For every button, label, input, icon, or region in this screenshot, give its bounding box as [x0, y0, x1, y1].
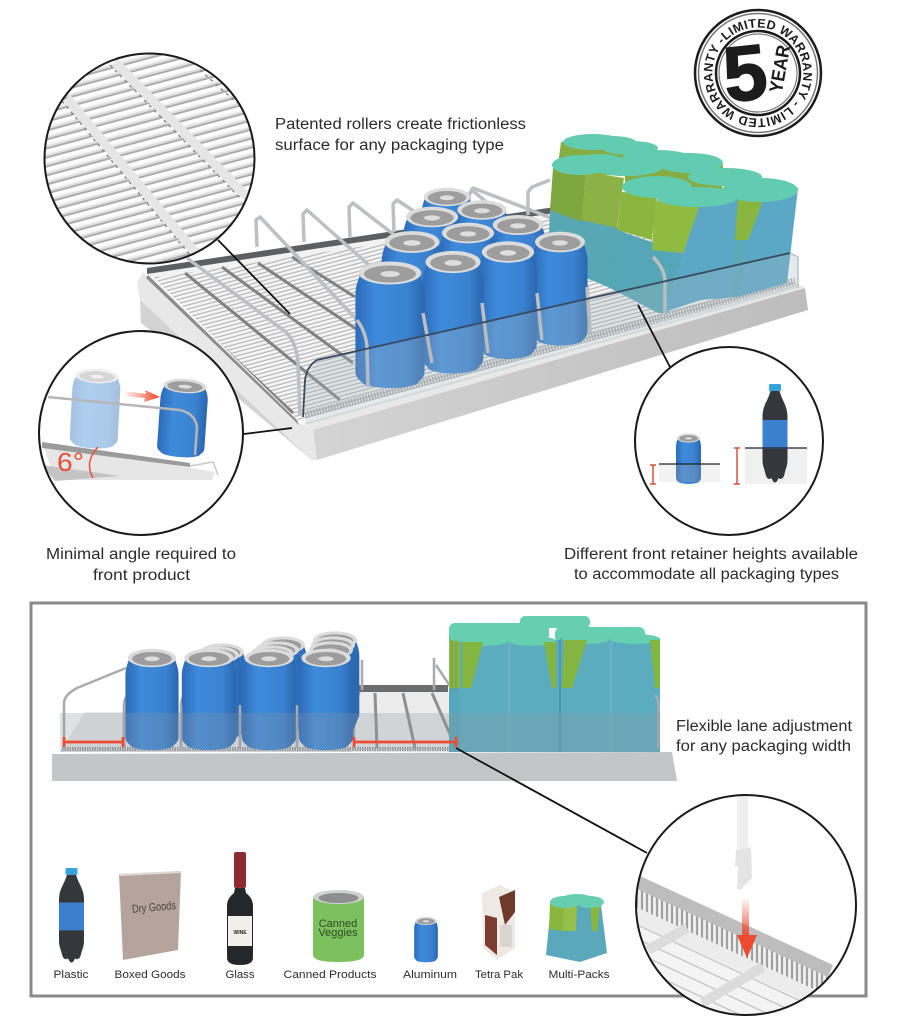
badge numeral: 5	[719, 27, 771, 119]
item: glass: Glass	[226, 969, 255, 981]
caption: angle: front product	[93, 567, 191, 584]
caption: retainer heights: Different front retainer heights available	[564, 546, 858, 563]
inset: divider tool	[635, 794, 857, 1016]
item: glass	[226, 852, 255, 981]
wire side view	[48, 397, 197, 455]
wire posts in front of cans	[357, 257, 665, 387]
caption: lane adjustment: Flexible lane adjustment	[676, 718, 853, 735]
item: canned products: Canned	[319, 918, 357, 930]
leader line: rollers	[218, 240, 290, 314]
roller tray surface	[147, 207, 800, 420]
leader line: angle	[244, 428, 292, 434]
pack rear right	[622, 150, 723, 190]
wire dividers	[64, 658, 456, 750]
retainer top lines	[659, 448, 807, 464]
caption: rollers: surface for any packaging type	[275, 137, 504, 154]
item: multi-packs: Multi-Packs	[548, 969, 610, 981]
caption: lane adjustment: for any packaging width	[676, 738, 851, 755]
caption: retainer heights: to accommodate all packaging types	[574, 566, 839, 583]
front lip of shelf	[305, 285, 808, 460]
angle arc	[89, 447, 98, 478]
lower wire posts in front	[124, 705, 297, 748]
lower shelf front view	[52, 616, 677, 781]
item: tetra pak	[475, 885, 524, 981]
solid can	[156, 377, 209, 459]
glass tint	[676, 464, 701, 482]
rollers	[638, 925, 800, 1014]
caption: rollers: Patented rollers create frictionless	[275, 116, 526, 133]
leader line: retainer	[638, 305, 670, 367]
red height markers	[650, 448, 740, 484]
item: canned products	[284, 890, 377, 981]
pack front	[608, 176, 738, 313]
can in short retainer	[676, 433, 701, 484]
package types row	[54, 852, 610, 981]
bottle	[762, 384, 788, 482]
warranty badge	[694, 8, 822, 138]
red width marker left	[64, 737, 123, 747]
badge ring text: LIMITED WARRANTY - LIMITED WARRANTY -	[704, 18, 812, 128]
rear cans	[193, 631, 359, 741]
symbol band	[637, 908, 813, 992]
item: aluminum	[403, 917, 457, 981]
insertion tool	[735, 790, 752, 889]
caption: angle: Minimal angle required to	[46, 546, 236, 563]
item: boxed goods: Boxed Goods	[114, 969, 186, 981]
shelf front face	[52, 752, 677, 781]
leader line: lane tool	[456, 748, 647, 853]
item: aluminum: Aluminum	[403, 969, 457, 981]
item: plastic	[54, 868, 89, 981]
main shelf unit	[137, 134, 808, 460]
front glass retainer	[303, 253, 798, 425]
motion arrow	[123, 390, 160, 402]
lane dividers	[648, 928, 763, 1003]
multi-pack front left	[460, 636, 560, 752]
panel: lane adjustment and package types	[31, 603, 866, 996]
tray floor	[60, 685, 660, 752]
angle value: 6°	[57, 447, 84, 477]
aluminum cans on shelf	[355, 188, 588, 388]
front cans	[125, 649, 353, 750]
tray side view	[42, 442, 218, 481]
item: tetra pak: Tetra Pak	[475, 969, 524, 981]
faded can	[69, 368, 121, 450]
item: canned products: Veggies	[318, 927, 358, 939]
item: plastic: Plastic	[54, 969, 89, 981]
front glass	[60, 713, 660, 752]
inset: 6 degree angle	[39, 331, 243, 535]
retainer panel tall	[745, 448, 807, 484]
pack rear left	[557, 134, 658, 178]
shelf side panel	[137, 272, 317, 460]
inset: retainer heights	[635, 347, 823, 535]
inset: roller close-up	[44, 54, 254, 264]
multi-packs back rows	[449, 616, 645, 752]
multi-pack front right	[560, 634, 660, 752]
toothed strip	[630, 888, 828, 992]
red down arrow	[737, 897, 757, 958]
wire lane dividers	[187, 180, 665, 415]
badge year: YEAR	[766, 43, 795, 95]
item: boxed goods	[114, 871, 186, 981]
item: glass: WINE	[233, 930, 247, 936]
item: canned products: Canned Products	[284, 969, 377, 981]
end wire	[655, 695, 659, 748]
retainer panel short	[659, 464, 720, 482]
multi-packs on shelf	[548, 134, 798, 313]
rear rail	[637, 876, 833, 977]
item: boxed goods: Dry Goods	[132, 900, 177, 916]
red width marker right	[354, 737, 456, 747]
pack front right	[688, 168, 798, 300]
item: multi-packs	[546, 894, 610, 981]
pack middle	[548, 154, 663, 290]
